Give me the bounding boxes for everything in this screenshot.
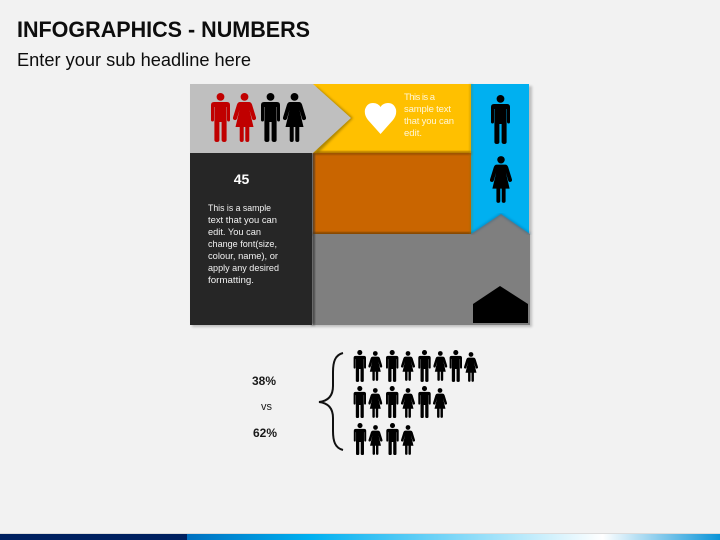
percentage labels: 62% [253, 426, 277, 440]
row 3 people [354, 423, 415, 455]
brace [319, 353, 343, 450]
dark block text: formatting. [208, 275, 254, 286]
icon: black man [261, 93, 280, 142]
subtitle: Enter your sub headline here [17, 50, 251, 70]
yellow block text: that you can [404, 116, 454, 127]
panel shadow [192, 86, 532, 327]
dark block text: edit. You can [208, 227, 261, 238]
title: INFOGRAPHICS - NUMBERS [17, 17, 310, 42]
yellow block text: This is a [404, 92, 436, 103]
yellow block text [404, 92, 454, 139]
percentage labels: vs [261, 401, 272, 413]
icon: blue column man [491, 95, 510, 144]
icon: red woman [233, 93, 256, 142]
dark block text: colour, name), or [208, 251, 278, 262]
icon: red man [211, 93, 230, 142]
row 2 people [354, 386, 447, 418]
panel: grey block with peak [313, 214, 530, 325]
icon: heart [365, 103, 396, 134]
people pictogram rows [354, 350, 478, 455]
dark block text: apply any desired [208, 263, 279, 274]
percentage labels: 38% [252, 374, 276, 388]
panel: yellow block [313, 84, 471, 153]
panel: dark text block [190, 153, 315, 325]
footer bar [0, 533, 720, 540]
icon: blue column woman [490, 156, 512, 203]
dark block text [208, 203, 279, 286]
row 1 people [354, 350, 478, 382]
number 45: 45 [234, 171, 249, 187]
dark block text: change font(size, [208, 239, 277, 250]
yellow block text: edit. [404, 128, 422, 139]
icon: house [473, 286, 528, 323]
dark block text: This is a sample [208, 203, 271, 214]
panel: orange block [313, 153, 471, 234]
yellow block text: sample text [404, 104, 451, 115]
main panel [190, 84, 532, 327]
percentage labels [252, 374, 277, 440]
dark block text: text that you can [208, 215, 277, 226]
panel: grey arrow block [190, 84, 353, 155]
icon: black woman [283, 93, 306, 142]
panel: blue column [471, 84, 529, 234]
